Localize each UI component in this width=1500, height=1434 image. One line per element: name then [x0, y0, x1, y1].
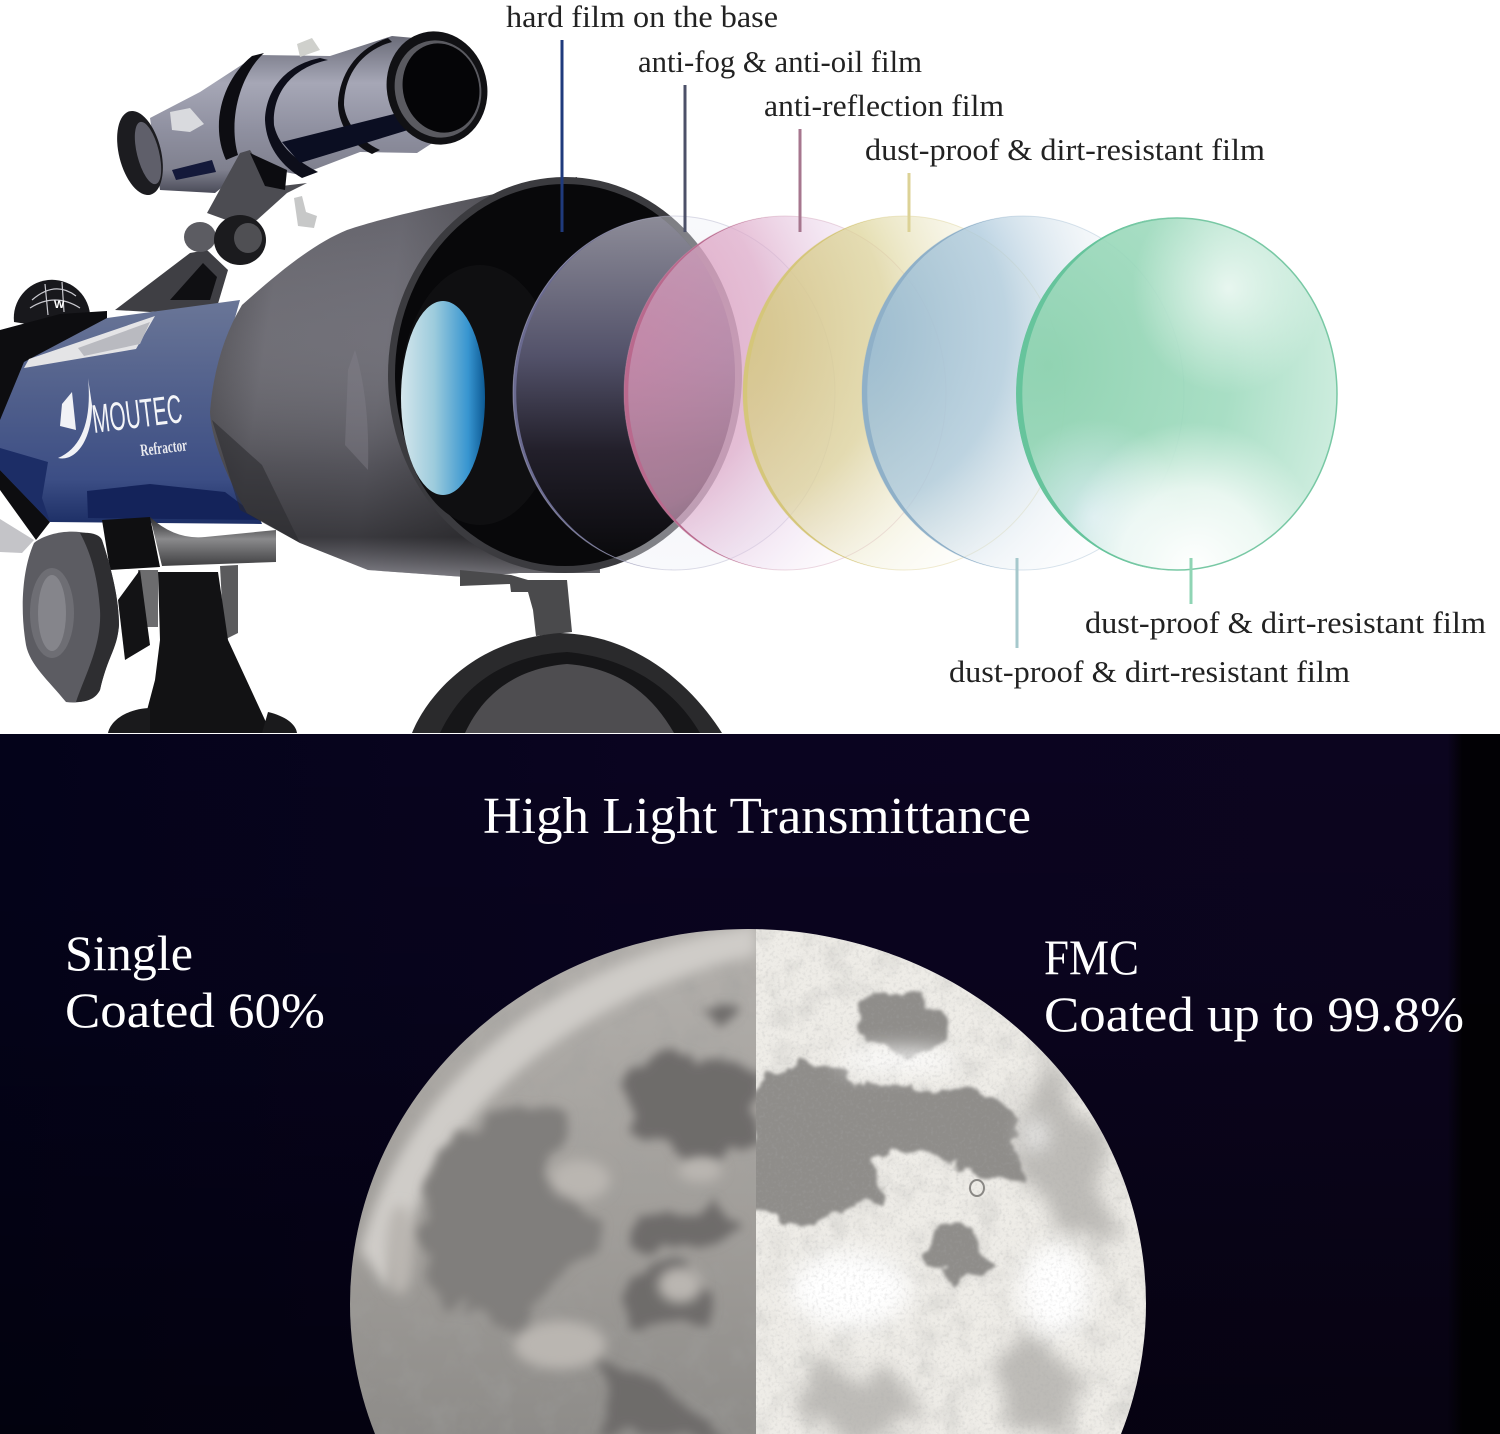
- compass: W: [54, 299, 65, 311]
- callout: anti-reflection film: [764, 88, 1004, 232]
- lens 5: green outer film: [1016, 217, 1337, 571]
- label: Single Coated 60%: [65, 925, 325, 1038]
- logo: Refractor: Refractor: [139, 435, 188, 460]
- callout: anti-reflection film: anti-reflection film: [764, 88, 1004, 123]
- finder scope: [109, 21, 499, 228]
- lens 1: hard film base: [512, 216, 789, 570]
- panel: night sky background: [0, 734, 1500, 1434]
- dew shield hood: [210, 177, 600, 577]
- logo: MOUTEC wordmark: MOUTEC: [90, 387, 184, 442]
- lens cap and strap: [412, 570, 722, 733]
- label: FMC Coated up to 99.8%: Coated up to 99.8%: [1044, 986, 1464, 1042]
- callout: dust-proof film, lower: [949, 558, 1350, 689]
- lens 3: anti-reflection film: [743, 216, 1065, 570]
- label: Single Coated 60%: Coated 60%: [65, 982, 325, 1038]
- label: Single Coated 60%: Single: [65, 925, 193, 981]
- callout: anti-fog and anti-oil film: [638, 44, 922, 232]
- callout: hard film on the base: hard film on the base: [506, 0, 778, 34]
- callout: hard film on the base: [506, 0, 778, 232]
- callout: dust-proof film, lower right: dust-proof & dirt-resistant film: [1085, 605, 1486, 640]
- label: FMC Coated up to 99.8%: FMC: [1044, 929, 1139, 985]
- main blue tube: [0, 300, 262, 553]
- compass: [14, 280, 90, 326]
- callout: dust-proof film, top: [865, 132, 1265, 232]
- objective lens glass: [401, 301, 485, 495]
- mount and tripod head: [23, 517, 297, 733]
- moon comparison: [340, 920, 1156, 1434]
- heading: High Light Transmittance: High Light Transmittance: [483, 788, 1031, 845]
- coating lens stack: [512, 216, 1338, 571]
- callout: dust-proof film, lower: dust-proof & dirt-resistant film: [949, 654, 1350, 689]
- logo: moon mark: [58, 378, 92, 458]
- callout: dust-proof film, lower right: [1085, 558, 1486, 640]
- lens 2: anti-fog and anti-oil film: [624, 216, 946, 570]
- hood mouth and objective lens: [388, 177, 742, 573]
- lens 4: dust-proof film: [862, 216, 1184, 570]
- background: white upper section: [0, 0, 1500, 735]
- callout: dust-proof film, top: dust-proof & dirt-resistant film: [865, 132, 1265, 167]
- finder bracket and knob: [115, 150, 307, 312]
- moon right half: FMC coated: [756, 929, 1146, 1434]
- label: FMC Coated up to 99.8%: [1044, 929, 1464, 1042]
- moon left half: single coated: [350, 929, 756, 1434]
- callout: anti-fog and anti-oil film: anti-fog & anti-oil film: [638, 44, 922, 79]
- telescope: [0, 21, 742, 733]
